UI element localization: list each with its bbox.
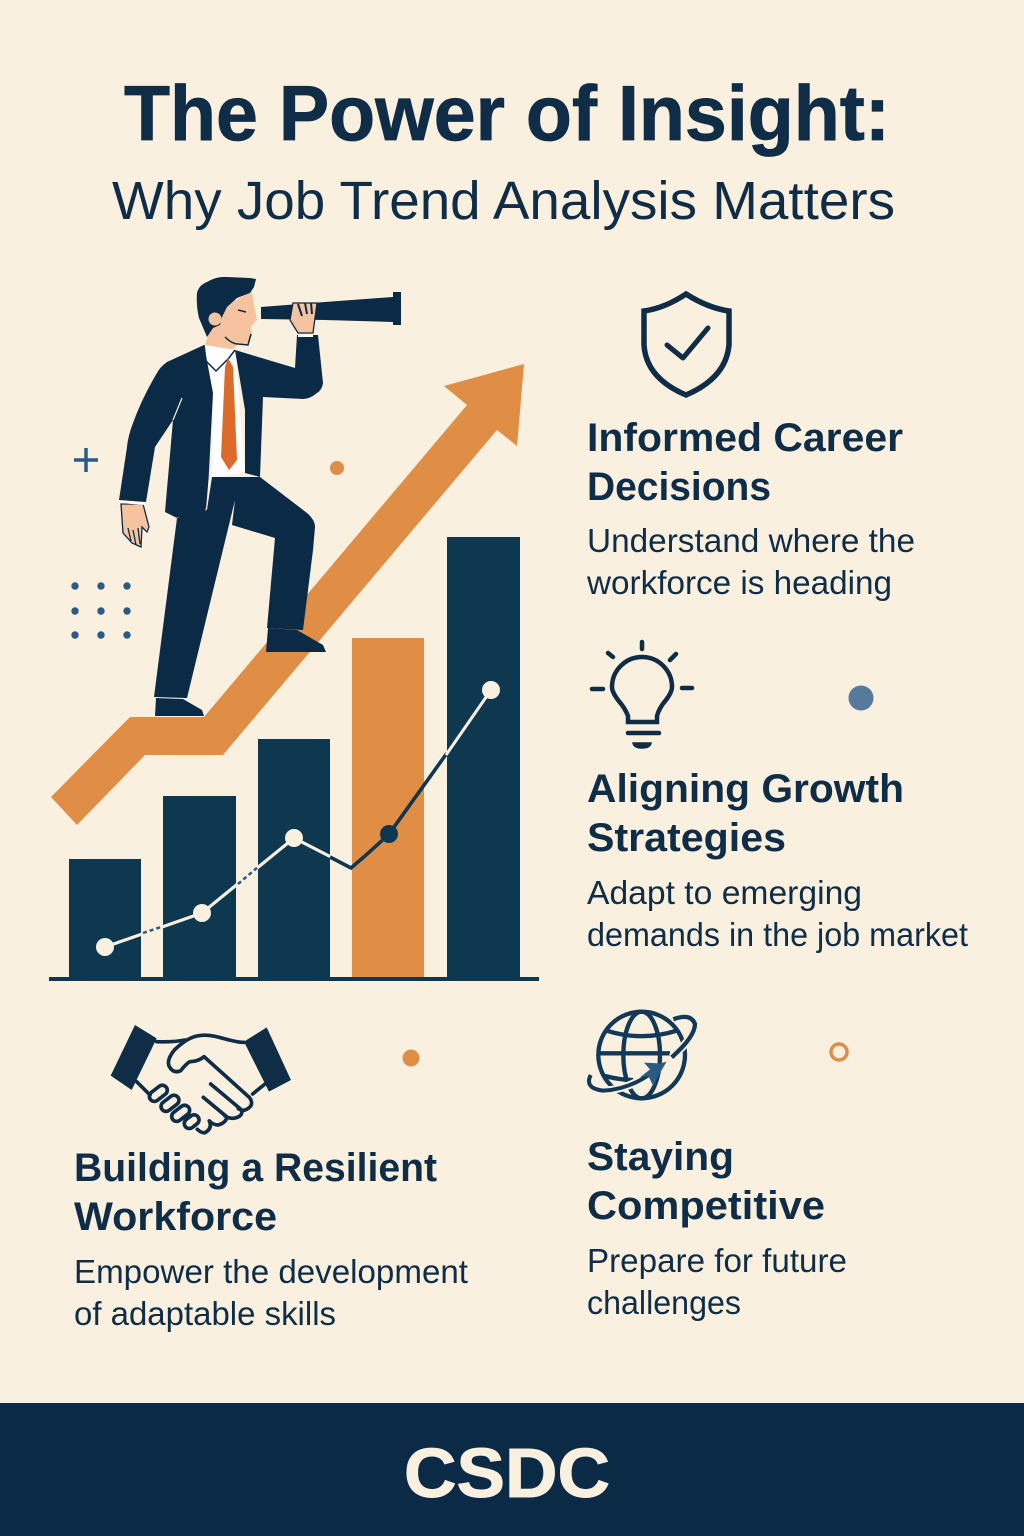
description (586, 522, 915, 601)
heading: Informed Career (587, 416, 903, 460)
heading (74, 1146, 437, 1239)
description: Empower the development (74, 1253, 468, 1290)
title (112, 69, 895, 231)
hair (197, 277, 256, 337)
heading: Building a Resilient (74, 1146, 437, 1190)
decorative orange dot (330, 461, 344, 475)
heading: Decisions (587, 465, 771, 509)
rising arrow (51, 364, 524, 825)
footer band (0, 1403, 1024, 1536)
heading: Strategies (587, 816, 786, 860)
description: demands in the job market (587, 916, 968, 953)
heading: Aligning Growth (587, 767, 904, 811)
heading: Staying (587, 1135, 734, 1179)
icon: globe with plane (589, 1012, 695, 1098)
description: of adaptable skills (74, 1295, 336, 1332)
shirt (204, 345, 245, 477)
title: The Power of Insight: (124, 69, 890, 157)
panel: aligning growth strategies (587, 642, 968, 953)
jacket left (119, 345, 213, 518)
jacket right and raised arm (235, 335, 323, 477)
decorative dot grid (71, 582, 131, 639)
telescope (261, 292, 401, 325)
description: Adapt to emerging (587, 874, 862, 911)
panel: staying competitive (587, 1012, 847, 1321)
businessman with telescope (119, 277, 401, 716)
icon: handshake (111, 1025, 291, 1133)
lower hand (120, 502, 149, 547)
tie (221, 358, 237, 470)
heading (587, 767, 904, 860)
decorative orange dot (402, 1050, 420, 1066)
description: Prepare for future (587, 1242, 847, 1279)
raised hand (290, 303, 317, 333)
heading (587, 416, 903, 509)
description (587, 1242, 847, 1321)
description: workforce is heading (586, 564, 892, 601)
icon: light bulb (592, 642, 692, 748)
bar chart (49, 537, 539, 981)
trousers (154, 477, 315, 698)
skin (205, 292, 257, 350)
shoes (155, 698, 204, 716)
panel: building a resilient workforce (74, 1025, 468, 1332)
title: Why Job Trend Analysis Matters (112, 171, 895, 231)
footer logo text: CSDC (404, 1434, 610, 1512)
heading: Competitive (587, 1184, 825, 1228)
heading (587, 1135, 825, 1228)
description: Understand where the (587, 522, 915, 559)
heading: Workforce (74, 1195, 277, 1239)
panel: informed career decisions (586, 294, 915, 601)
description (74, 1253, 468, 1332)
icon: shield (644, 294, 729, 395)
decorative blue dot (848, 686, 874, 710)
description (587, 874, 968, 953)
icon: decorative plus (74, 448, 98, 472)
trend line (96, 681, 500, 956)
decorative orange ring (831, 1044, 847, 1060)
description: challenges (587, 1284, 741, 1321)
